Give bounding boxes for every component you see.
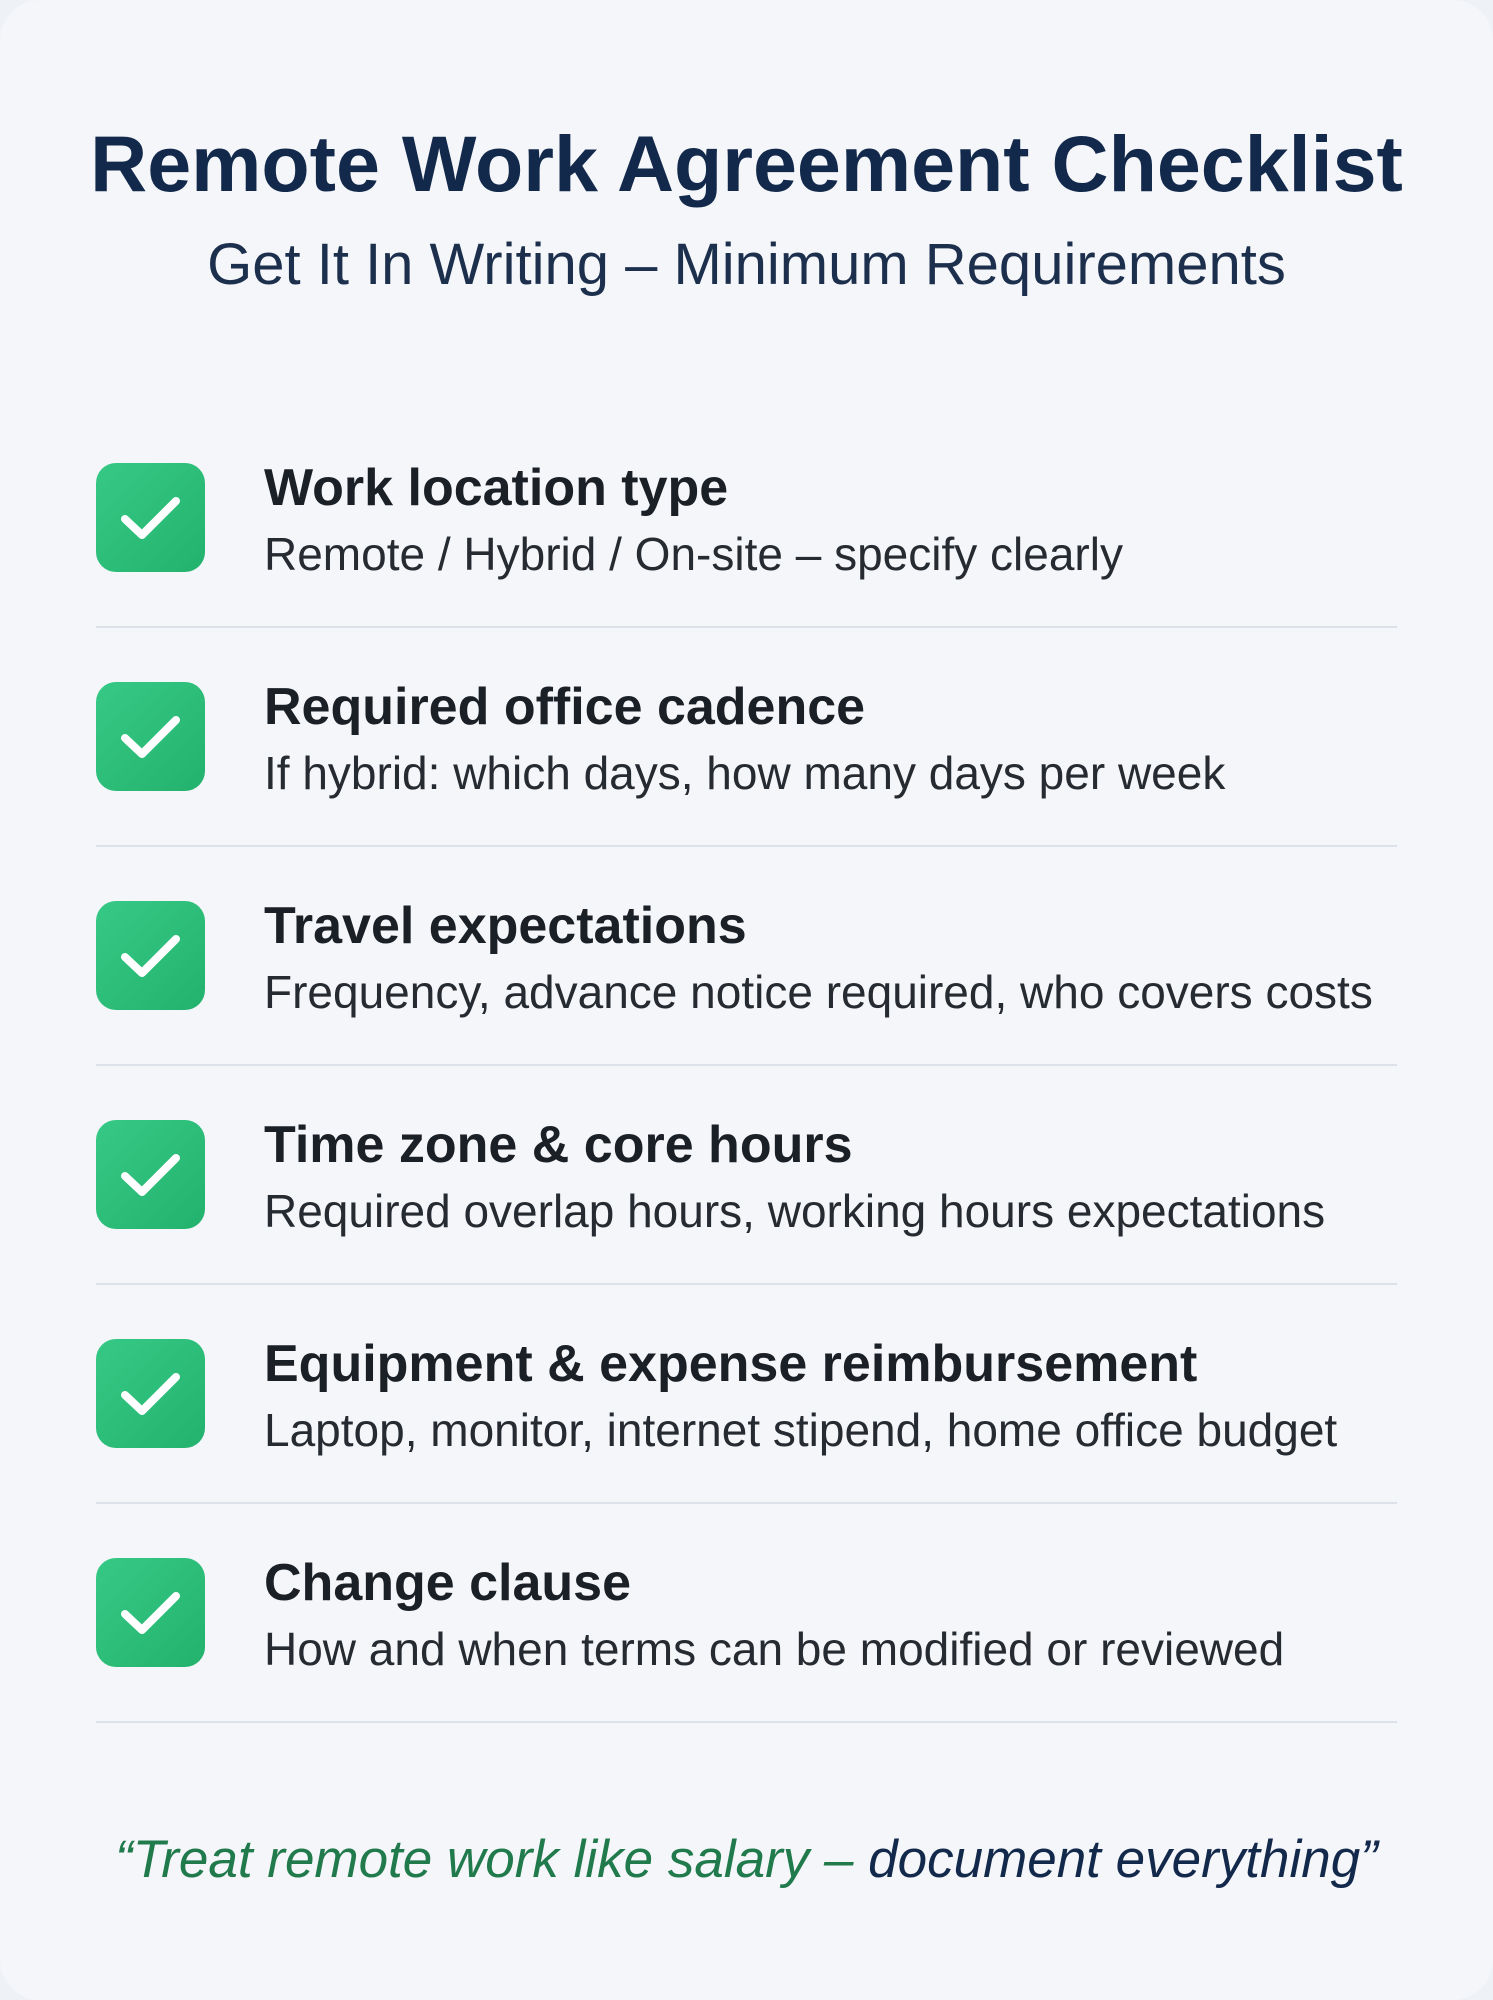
icon: check xyxy=(96,463,205,572)
heading: Time zone & core hours xyxy=(264,1116,853,1174)
description: Laptop, monitor, internet stipend, home office budget xyxy=(264,1404,1337,1456)
icon: check xyxy=(96,1120,205,1229)
checklist item: time zone xyxy=(96,1116,1397,1285)
heading: Change clause xyxy=(264,1554,631,1612)
description: Required overlap hours, working hours expectations xyxy=(264,1185,1325,1237)
heading: Required office cadence xyxy=(264,678,865,736)
icon: check xyxy=(96,1558,205,1667)
description: If hybrid: which days, how many days per week xyxy=(264,747,1225,799)
title: Remote Work Agreement Checklist xyxy=(90,119,1403,208)
icon: check xyxy=(96,1339,205,1448)
description: Frequency, advance notice required, who covers costs xyxy=(264,966,1373,1018)
checklist item: change clause xyxy=(96,1554,1397,1723)
checklist item: equipment xyxy=(96,1335,1397,1504)
checklist item: office cadence xyxy=(96,678,1397,847)
icon: check xyxy=(96,682,205,791)
description: Remote / Hybrid / On-site – specify clearly xyxy=(264,528,1123,580)
checklist item: travel xyxy=(96,897,1397,1066)
heading: Travel expectations xyxy=(264,897,747,955)
checklist item: work location xyxy=(96,459,1397,628)
icon: check xyxy=(96,901,205,1010)
subtitle: Get It In Writing – Minimum Requirements xyxy=(207,232,1286,297)
description: How and when terms can be modified or reviewed xyxy=(264,1623,1284,1675)
heading: Equipment & expense reimbursement xyxy=(264,1335,1197,1393)
heading: Work location type xyxy=(264,459,728,517)
quote: “Treat remote work like salary – document everything” xyxy=(115,1830,1378,1889)
